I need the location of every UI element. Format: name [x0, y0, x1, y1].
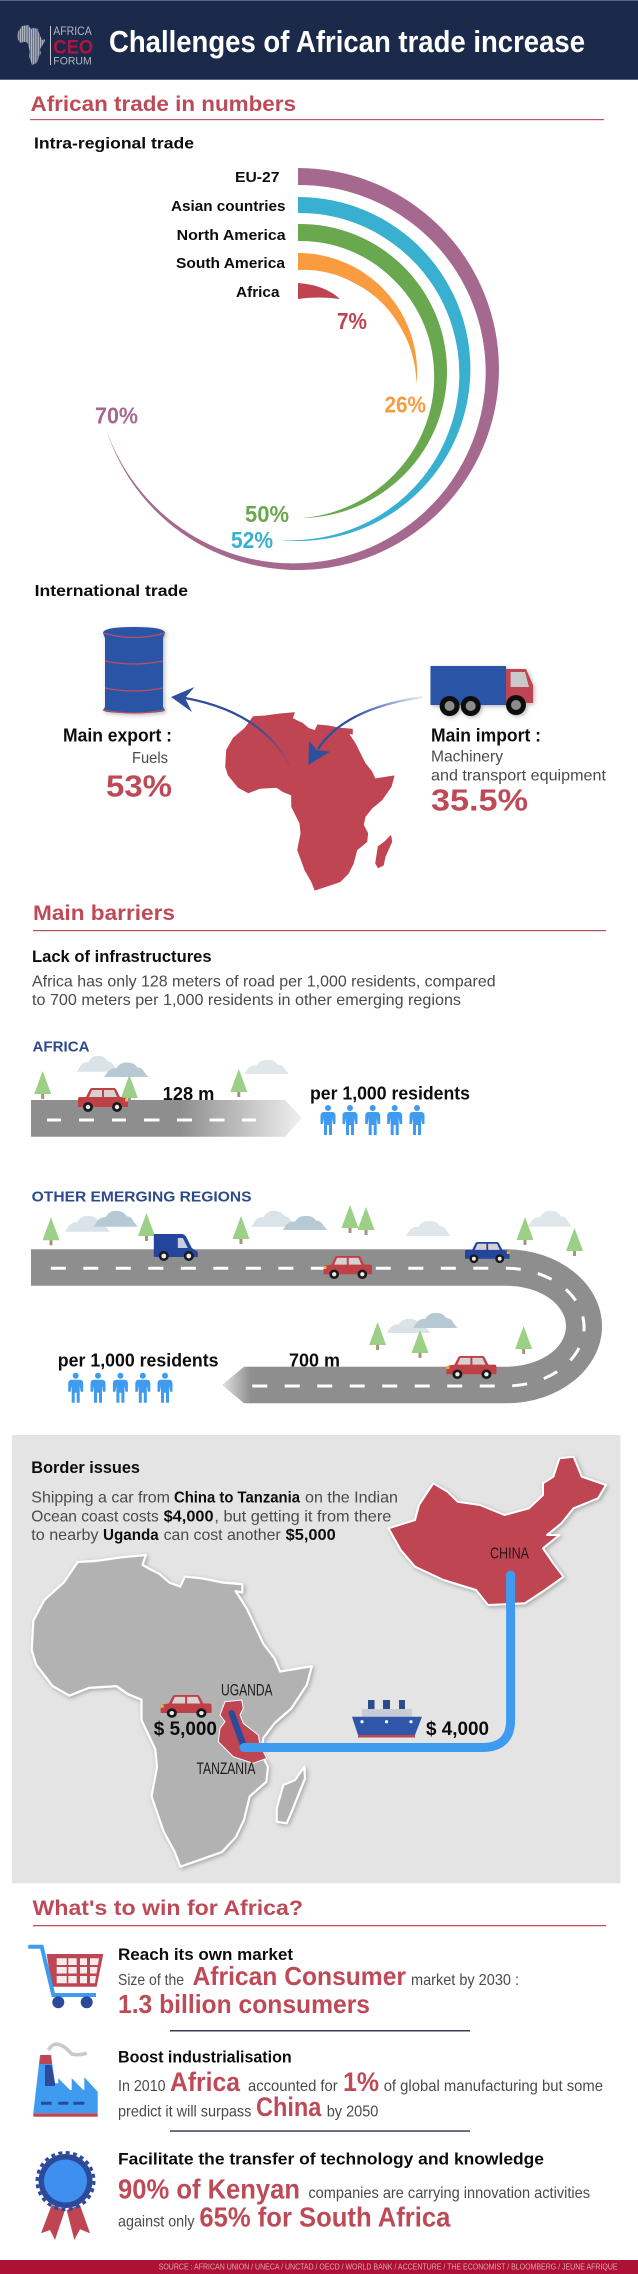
text: market by 2030 :: [411, 1972, 519, 1989]
text block: shipping cost: China to Tanzania: [174, 1490, 300, 1507]
diagram: international trade: [63, 627, 607, 890]
percentage values: [95, 308, 426, 553]
text: African Consumer: [192, 1961, 406, 1991]
text: 65% for South Africa: [199, 2202, 451, 2233]
subheading: international trade: International trade: [35, 583, 188, 600]
icon: shopping cart: [28, 1947, 103, 2008]
label: China: CHINA: [490, 1545, 529, 1562]
text: predict it will surpass: [118, 2104, 251, 2121]
text: 1%: [343, 2067, 379, 2097]
icon: oil barrel: [103, 627, 165, 713]
logo: Africa CEO Forum: CEO: [53, 37, 93, 58]
heading: what's to win for Africa: What's to win for Africa?: [32, 1896, 303, 1920]
car: red: [78, 1088, 128, 1112]
label: other emerging regions: OTHER EMERGING REGIONS: [32, 1189, 252, 1206]
text block: shipping cost: $5,000: [286, 1527, 336, 1544]
trees: [34, 1069, 247, 1103]
category labels: [171, 169, 286, 301]
text: [118, 2149, 590, 2233]
text: [118, 1945, 519, 2019]
arc: Asian countries 52%: [276, 197, 470, 541]
map: Africa red: [226, 713, 394, 890]
percentage values: 7%: [337, 308, 367, 334]
text block: shipping cost: , but getting it from there: [214, 1509, 392, 1526]
text: main export: [63, 725, 172, 804]
van: blue: [154, 1234, 198, 1261]
text block: shipping cost: [31, 1490, 398, 1544]
label: per 1,000 residents: per 1,000 residents: [310, 1083, 470, 1103]
text: In 2010: [118, 2078, 166, 2095]
footer: sources: [0, 2260, 638, 2274]
text: main import: and transport equipment: [431, 768, 607, 785]
text block: lack of infrastructures: to 700 meters per 1,000 residents in other emerging regions: [32, 992, 461, 1009]
header banner: [0, 0, 638, 80]
road: [31, 1100, 302, 1137]
percentage values: 26%: [384, 392, 426, 418]
category labels: North America: [177, 227, 286, 244]
car: red, upper road: [324, 1256, 372, 1279]
logo: Africa CEO Forum: AFRICA: [53, 26, 92, 38]
text: main export: Fuels: [132, 750, 168, 767]
panel: border issues: [12, 1435, 620, 1883]
text block: shipping cost: on the Indian: [305, 1490, 398, 1507]
text: companies are carrying innovation activities: [308, 2185, 590, 2202]
clouds: [65, 1211, 572, 1333]
text block: lack of infrastructures: Africa has only 128 meters of road per 1,000 residents, compared: [32, 974, 496, 991]
heading: African trade in numbers: African trade in numbers: [30, 93, 296, 116]
subheading: intra-regional trade: Intra-regional trade: [34, 136, 194, 153]
value: 700 m: 700 m: [289, 1351, 340, 1371]
text: main import: Machinery: [431, 749, 503, 766]
car: blue: [465, 1242, 510, 1263]
label: per 1,000 residents: per 1,000 residents: [58, 1351, 218, 1371]
text block: lack of infrastructures: Lack of infrastructures: [32, 947, 212, 966]
text: [118, 2048, 603, 2122]
dividers: [170, 2030, 470, 2132]
text block: shipping cost: Uganda: [103, 1527, 159, 1544]
text: 1.3 billion consumers: [118, 1989, 370, 2019]
map: China: [388, 1457, 606, 1605]
text block: shipping cost: to nearby: [31, 1527, 98, 1544]
text: against only: [118, 2214, 194, 2231]
map: Africa grey: [32, 1555, 312, 1867]
text block: shipping cost: Shipping a car from: [31, 1490, 170, 1507]
people icons: [68, 1373, 172, 1403]
arrow: export to barrel: [171, 687, 290, 766]
text block: shipping cost: Ocean coast costs: [31, 1509, 159, 1526]
heading: border issues: Border issues: [31, 1458, 140, 1477]
arc: EU-27 70%: [107, 168, 499, 570]
arrow: import to Africa: [308, 697, 423, 765]
text: Boost industrialisation: [118, 2048, 292, 2067]
item: boost industrialisation: [33, 2044, 603, 2122]
label: Tanzania: TANZANIA: [196, 1759, 256, 1778]
text: accounted for: [248, 2078, 338, 2095]
icon: truck: [430, 666, 533, 716]
title: Challenges of African trade increase: [109, 24, 585, 59]
logo: Africa CEO Forum: FORUM: [53, 55, 92, 67]
arc: South America 26%: [298, 253, 417, 384]
radial chart: intra-regional trade shares: [95, 168, 499, 570]
icon: factory: [33, 2044, 98, 2117]
map: Uganda and Tanzania: [218, 1700, 267, 1763]
car: red, $5,000: [161, 1695, 212, 1718]
text block: shipping cost: can cost another: [164, 1527, 281, 1544]
text: by 2050: [327, 2104, 378, 2121]
road: [31, 1249, 602, 1403]
item: transfer of technology: [37, 2149, 590, 2240]
category labels: EU-27: [235, 169, 280, 186]
arc: North America 50%: [298, 224, 447, 518]
route: Tanzania to Uganda: [232, 1713, 243, 1745]
road graphic: other emerging regions: [31, 1189, 602, 1403]
label: Uganda: UGANDA: [221, 1681, 273, 1700]
text block: lack of infrastructures: [32, 947, 496, 1009]
percentage values: 52%: [231, 527, 273, 553]
value: 128 m: 128 m: [163, 1084, 214, 1104]
text: Africa: [170, 2067, 241, 2097]
icon: ship: [352, 1700, 422, 1738]
percentage values: 50%: [245, 501, 289, 527]
arc: Africa 7%: [298, 283, 340, 299]
text: main import: 35.5%: [431, 783, 528, 818]
trees: [42, 1205, 583, 1358]
text: Facilitate the transfer of technology and knowledge: [118, 2149, 544, 2168]
text: main import: Main import :: [431, 725, 541, 746]
text: Size of the: [118, 1972, 184, 1989]
item: reach its own market: [28, 1945, 519, 2019]
text: main import: [431, 725, 607, 818]
icon: award ribbon: [37, 2152, 94, 2240]
text: Reach its own market: [118, 1945, 293, 1964]
car: red, lower road: [446, 1356, 496, 1379]
route: China to Tanzania: [244, 1575, 511, 1748]
category labels: Africa: [236, 284, 280, 301]
road graphic: Africa: [31, 1039, 470, 1137]
logo: Africa CEO Forum: [17, 25, 93, 67]
clouds: [77, 1056, 289, 1077]
category labels: South America: [176, 255, 286, 272]
text: main export: 53%: [106, 769, 172, 804]
text block: shipping cost: $4,000: [164, 1509, 214, 1526]
value: $5,000: $ 5,000: [154, 1718, 217, 1740]
text: main export: Main export :: [63, 725, 172, 746]
category labels: Asian countries: [171, 198, 286, 215]
percentage values: 70%: [95, 403, 138, 429]
text: of global manufacturing but some: [384, 2078, 603, 2095]
text: China: [256, 2092, 322, 2122]
value: $4,000: $ 4,000: [426, 1718, 489, 1740]
people icons: [320, 1105, 424, 1135]
text: 90% of Kenyan: [118, 2173, 300, 2204]
heading: main barriers: Main barriers: [33, 902, 175, 925]
label: Africa: AFRICA: [32, 1039, 90, 1056]
